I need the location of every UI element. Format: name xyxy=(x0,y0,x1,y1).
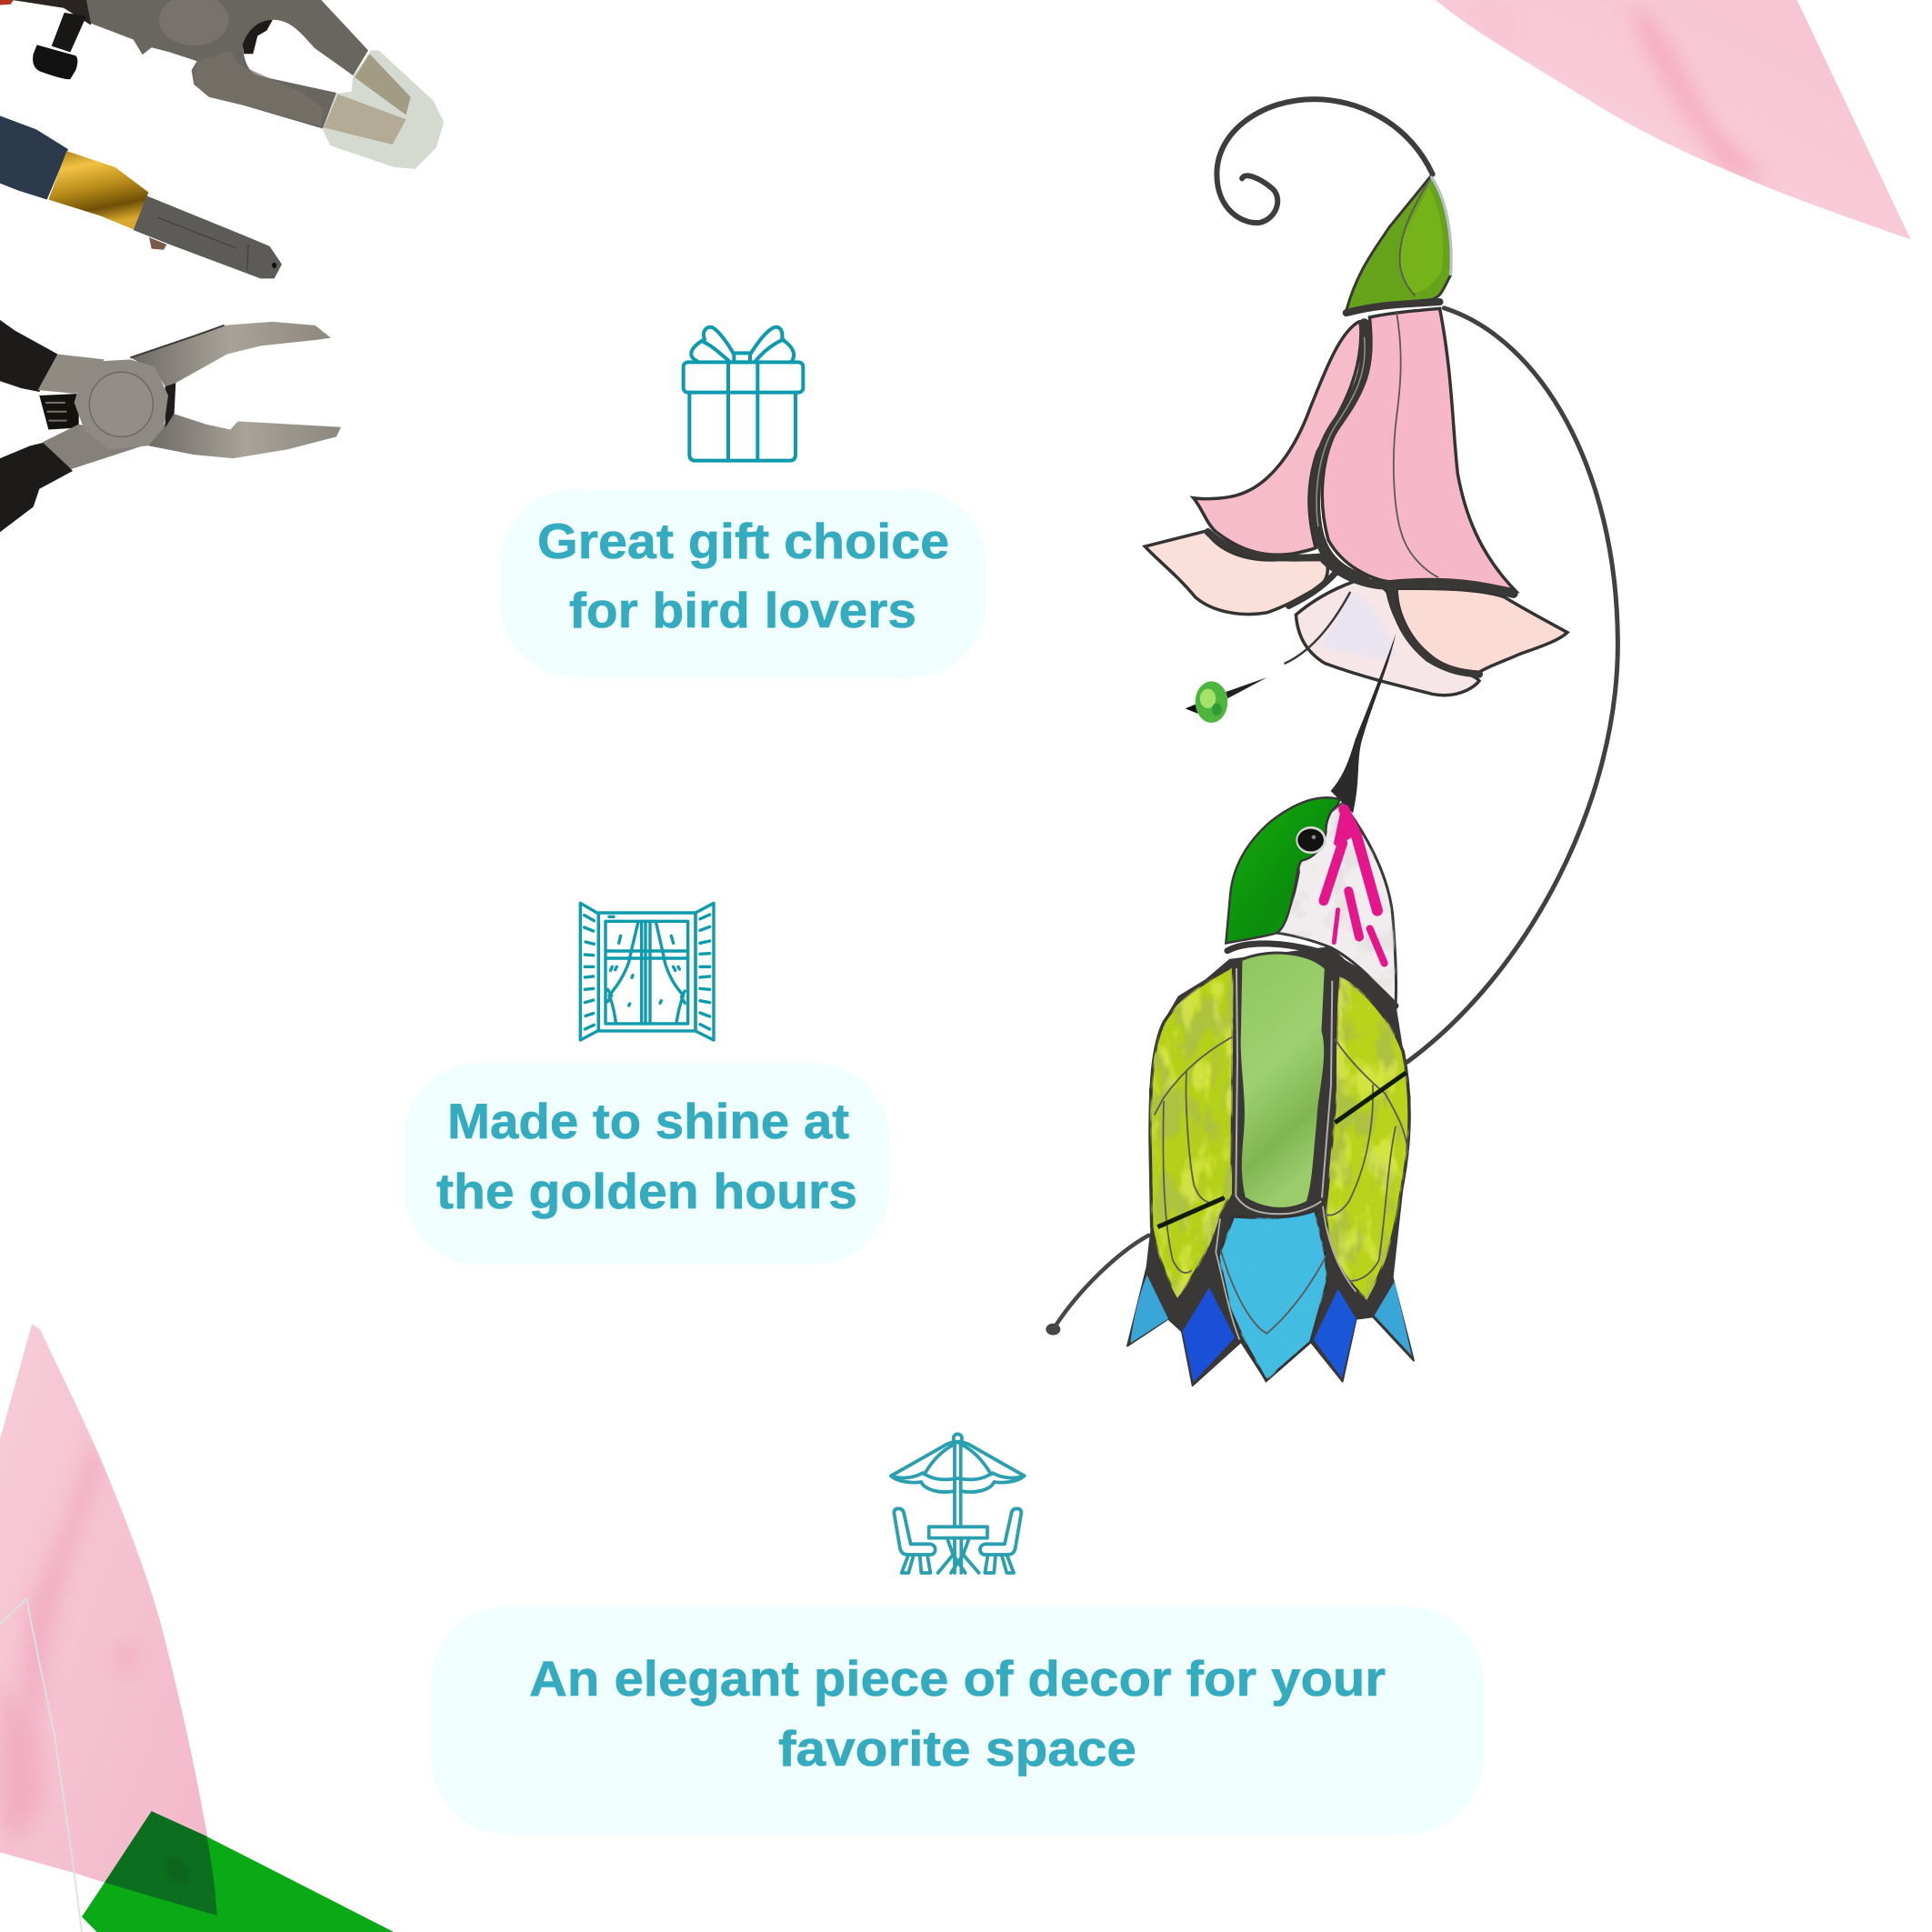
green head xyxy=(1226,797,1339,943)
glass sheet: pink, top right xyxy=(1436,0,1911,239)
pill: elegant decor xyxy=(431,1607,1484,1834)
pill: great gift choice: for bird lovers xyxy=(569,582,916,638)
blue lower body xyxy=(1219,1212,1327,1383)
bead with pin xyxy=(1186,677,1267,723)
tools xyxy=(0,0,444,532)
icon: gift box xyxy=(684,327,803,461)
pill: made to shine xyxy=(404,1063,889,1265)
icon: patio umbrella with table and chairs xyxy=(891,1434,1025,1573)
left wing xyxy=(1148,964,1236,1302)
upper left petal xyxy=(1194,322,1361,555)
pill: great gift choice xyxy=(500,489,986,677)
glass sheet: pink with crack, bottom left xyxy=(0,1325,207,1932)
beak xyxy=(1331,634,1396,813)
white throat xyxy=(1273,801,1400,1010)
petal vein xyxy=(1394,313,1438,577)
lower middle petal xyxy=(1296,581,1479,696)
calyx xyxy=(1346,176,1451,311)
hanging curl wire xyxy=(1216,99,1433,223)
pill: made to shine: Made to shine at xyxy=(447,1093,849,1149)
body lead lines xyxy=(1216,944,1396,1340)
green back panel xyxy=(1239,953,1326,1208)
glass sheet: green, bottom left xyxy=(82,1811,394,1932)
magenta throat streaks xyxy=(1324,807,1385,963)
pill: made to shine: the golden hours xyxy=(436,1163,857,1219)
tool: glass cutter xyxy=(0,115,282,278)
icon: window with shutters xyxy=(580,903,714,1040)
lower left petal xyxy=(1145,531,1327,615)
tool: long nose pliers xyxy=(0,320,341,532)
pill: elegant decor: An elegant piece of decor for your xyxy=(529,1650,1386,1707)
lower right petal xyxy=(1396,588,1567,672)
flower xyxy=(1145,99,1567,723)
pill: great gift choice: Great gift choice xyxy=(537,513,949,569)
crack line xyxy=(0,1598,82,1932)
lead lines xyxy=(1208,302,1514,675)
tail feathers xyxy=(1130,1275,1412,1382)
eye xyxy=(1296,826,1326,854)
tail branch wire xyxy=(1046,1236,1148,1336)
right wing xyxy=(1325,973,1412,1306)
pill: elegant decor: favorite space xyxy=(778,1720,1136,1777)
lead backing silhouette xyxy=(1127,947,1414,1386)
upper centre petal xyxy=(1322,308,1516,591)
tool: grozing pliers xyxy=(0,0,444,169)
hummingbird xyxy=(1046,797,1414,1386)
long support wire xyxy=(1407,308,1617,1062)
